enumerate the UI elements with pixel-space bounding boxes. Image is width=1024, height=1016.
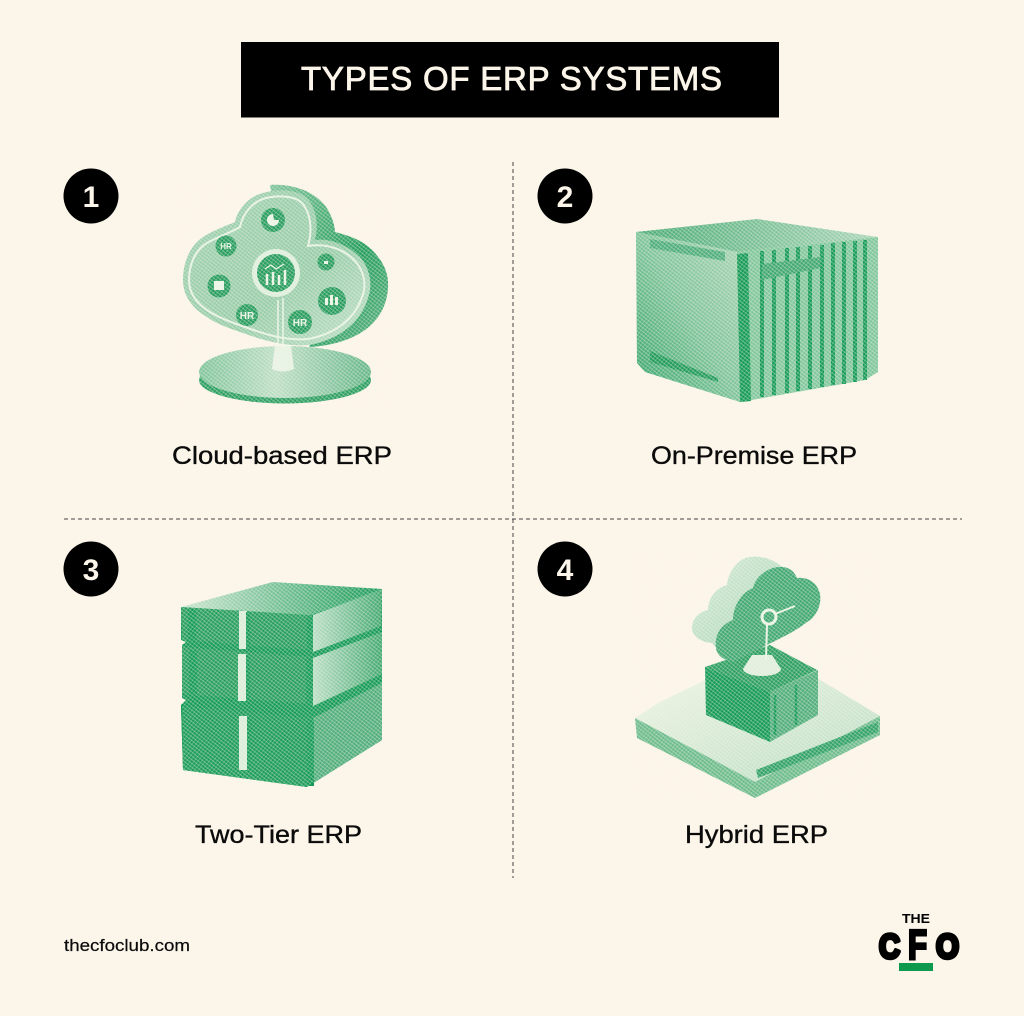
number badge 1: 1 [83,181,99,214]
logo: C [879,928,900,966]
label: Cloud-based ERP [172,442,392,470]
icon: cloud on disc: HR [240,311,255,322]
icon: cloud on disc [175,180,395,408]
panel: hybrid ERP [538,542,885,849]
logo: F [908,921,927,968]
logo [879,911,959,971]
title [241,42,779,118]
vertical divider [512,162,514,878]
icon: server box [636,219,878,402]
panel: on-premise ERP [538,168,878,470]
panel: two-tier ERP [64,542,382,849]
label: Hybrid ERP [685,821,828,849]
label: On-Premise ERP [651,442,857,470]
number badge 3: 3 [83,554,99,587]
logo: THE [902,911,930,926]
number badge 3 [64,542,118,596]
panel: cloud-based ERP [64,168,395,470]
number badge 2 [538,168,592,224]
number badge 4: 4 [557,554,574,587]
logo: O [936,928,959,966]
number badge 1 [64,168,118,224]
number badge 2: 2 [557,181,573,214]
label: Two-Tier ERP [195,821,362,849]
icon: cloud on disc: HR [220,242,232,251]
module circles [208,208,346,334]
icon: cloud on disc: HR [293,318,308,329]
number badge 4 [538,542,592,596]
horizontal divider [64,518,962,520]
icon: cloud on server [630,552,885,802]
website: thecfoclub.com [64,937,190,955]
title: TYPES OF ERP SYSTEMS [301,60,722,97]
chart hub [252,249,300,297]
icon: server stack [181,582,382,787]
